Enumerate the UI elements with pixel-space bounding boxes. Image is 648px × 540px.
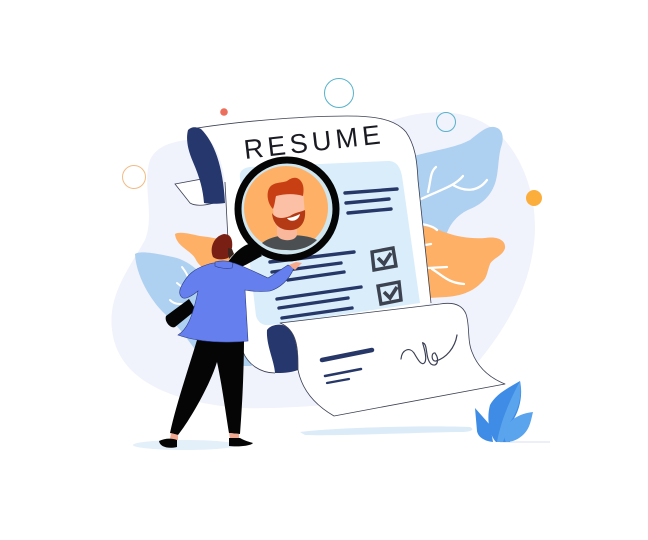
light blue content panel	[240, 161, 420, 325]
portrait: beard	[272, 210, 305, 230]
hand	[289, 262, 302, 270]
ring: right	[436, 112, 456, 132]
plant	[475, 381, 533, 442]
shoes	[159, 438, 253, 448]
ring: left	[122, 166, 146, 188]
man	[159, 234, 302, 448]
leaf: top right blue	[410, 127, 503, 233]
text lines: lower	[277, 287, 361, 318]
ground shadow: paper	[300, 426, 472, 435]
leaf: left blue	[135, 252, 252, 366]
head	[212, 234, 232, 259]
lower navy curl	[267, 325, 298, 373]
trousers	[170, 338, 244, 435]
magnifier handle top	[228, 243, 262, 268]
ground shadow: man	[133, 440, 237, 450]
dot: orange	[526, 190, 542, 206]
checkbox 1	[372, 248, 396, 270]
resume back flap	[175, 179, 214, 205]
portrait: neck	[277, 222, 297, 240]
resume outline	[197, 116, 431, 373]
text lines: middle	[270, 252, 354, 280]
ring: top	[324, 78, 354, 108]
dot: red	[220, 108, 228, 116]
leaf: left orange	[175, 233, 240, 278]
magnifying glass	[238, 160, 336, 258]
top navy curl	[187, 127, 225, 204]
checkbox 2	[378, 282, 401, 304]
leaf: right orange	[420, 224, 505, 298]
magnifier handle bottom	[166, 299, 196, 327]
portrait: smile	[287, 214, 300, 221]
lower sheet text lines	[322, 350, 372, 383]
collar	[215, 261, 233, 268]
ankles	[170, 433, 239, 440]
portrait: face	[272, 190, 305, 228]
background blob	[111, 112, 535, 408]
ground shadow: plant	[500, 441, 550, 443]
shirt	[178, 263, 294, 342]
signature	[401, 335, 457, 365]
title: RESUME	[242, 119, 386, 165]
resume main sheet	[197, 116, 431, 373]
portrait: hair	[268, 178, 304, 209]
text lines: top right	[345, 189, 397, 213]
ear and beard	[228, 248, 234, 259]
portrait: shirt	[262, 235, 317, 250]
lower sheet	[280, 303, 505, 416]
